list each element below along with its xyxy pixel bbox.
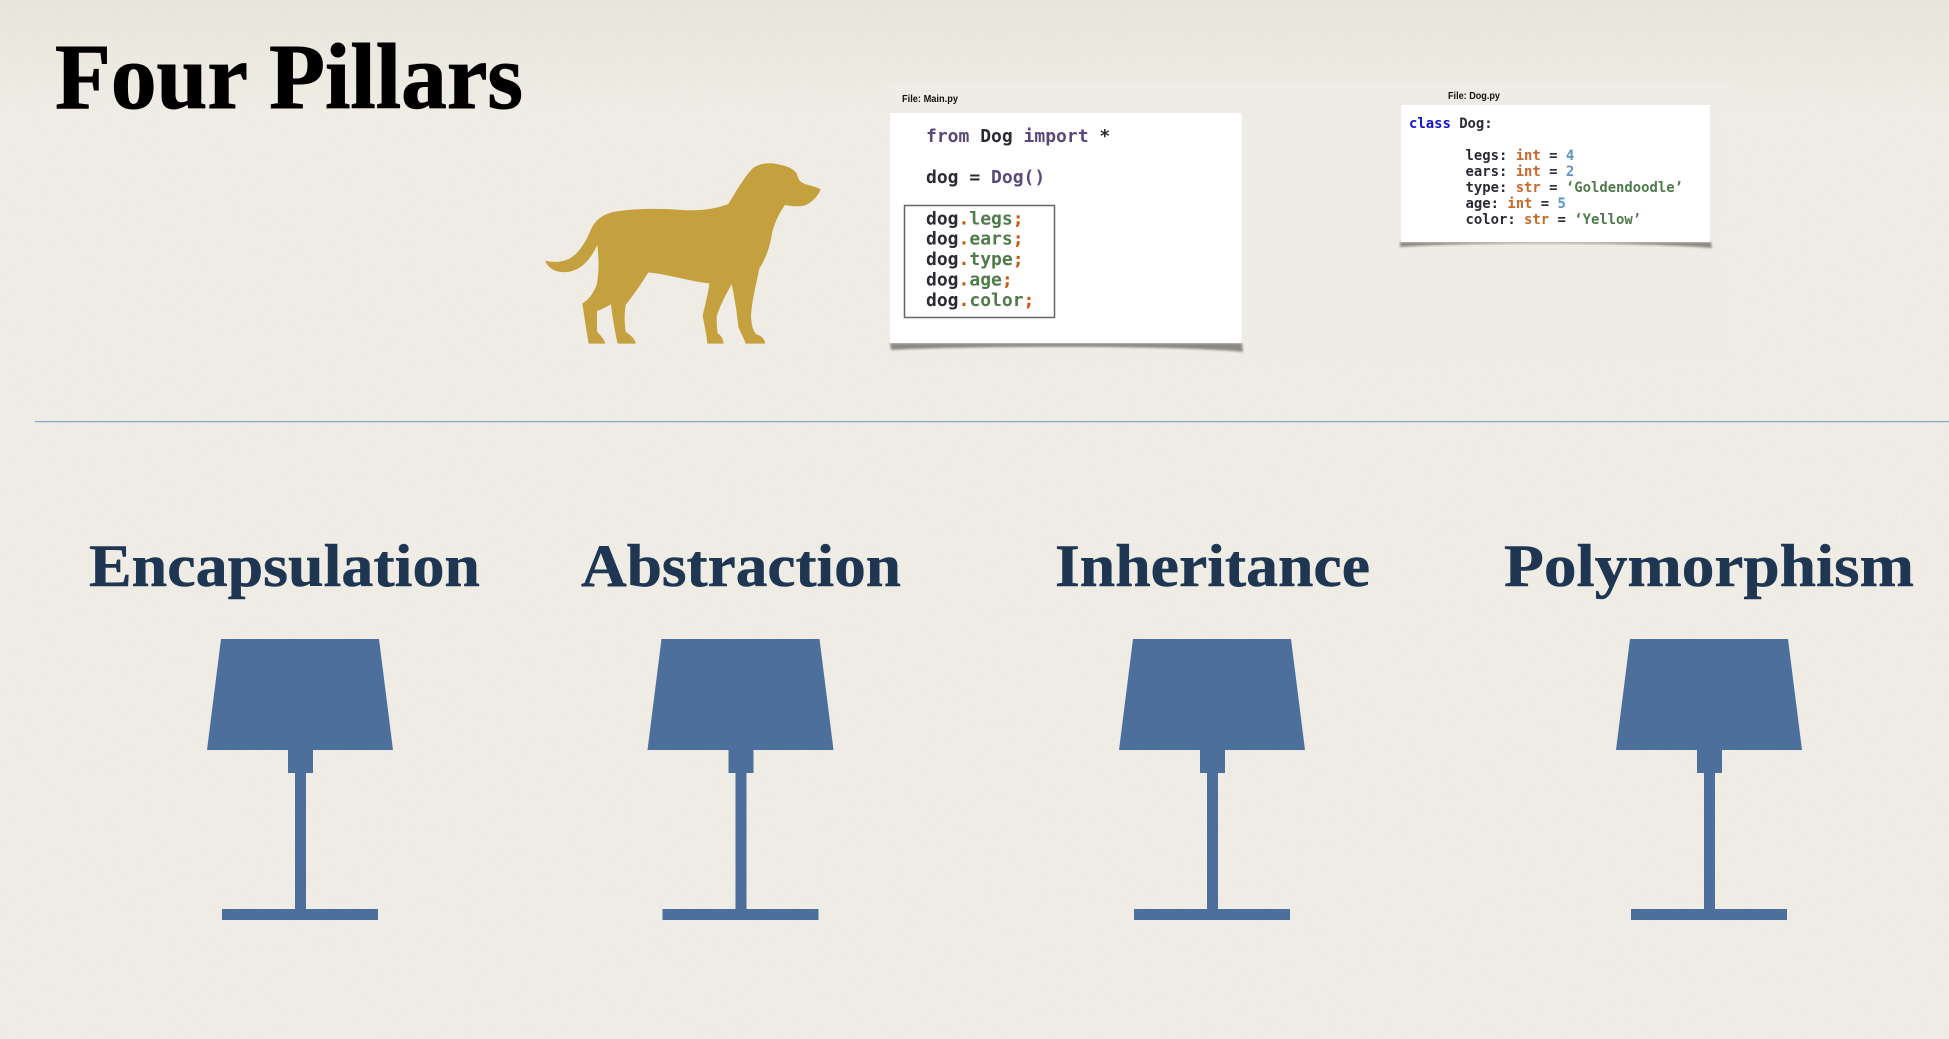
heading: Abstraction: Abstraction xyxy=(581,533,901,599)
file label: Main.py: File: Main.py xyxy=(902,94,958,105)
panel: Dog.py code card: ears: int = 2 xyxy=(1466,164,1574,180)
highlighted box of attribute accesses xyxy=(904,206,1054,318)
panel: Dog.py code card: type: str = ‘Goldendoodle’ xyxy=(1466,180,1683,196)
code: class definition: class Dog: xyxy=(1409,116,1493,132)
file label: Dog.py: File: Dog.py xyxy=(1448,91,1500,102)
icon: pillar lamp 1 xyxy=(207,639,393,920)
panel: Dog.py code card: age: int = 5 xyxy=(1466,196,1566,212)
highlighted box of attribute accesses: dog.color; xyxy=(926,290,1034,311)
heading: Encapsulation: Encapsulation xyxy=(89,533,480,599)
highlighted box of attribute accesses: dog.type; xyxy=(926,249,1024,270)
panel: code screenshots backdrop xyxy=(885,84,1727,365)
panel: Dog.py code card: legs: int = 4 xyxy=(1466,148,1574,164)
title: Four Pillars xyxy=(55,26,523,129)
icon: dog silhouette xyxy=(545,163,821,344)
highlighted box of attribute accesses: dog.legs; xyxy=(926,208,1024,230)
panel: Main.py code card xyxy=(890,94,1243,352)
icon: pillar lamp 4 xyxy=(1616,639,1802,920)
highlighted box of attribute accesses: dog.age; xyxy=(926,270,1013,290)
code: import and instantiation: from Dog import * xyxy=(926,126,1110,147)
icon: pillar lamp 3 xyxy=(1119,639,1305,920)
highlighted box of attribute accesses: dog.ears; xyxy=(926,228,1024,250)
panel: Dog.py code card: color: str = ‘Yellow’ xyxy=(1466,212,1641,228)
icon: pillar lamp 2 xyxy=(648,639,834,920)
panel: Dog.py code card xyxy=(1400,91,1712,248)
heading: Polymorphism: Polymorphism xyxy=(1504,533,1914,599)
heading: Inheritance: Inheritance xyxy=(1055,533,1370,599)
panel: Main.py code card: dog = Dog() xyxy=(926,167,1045,188)
